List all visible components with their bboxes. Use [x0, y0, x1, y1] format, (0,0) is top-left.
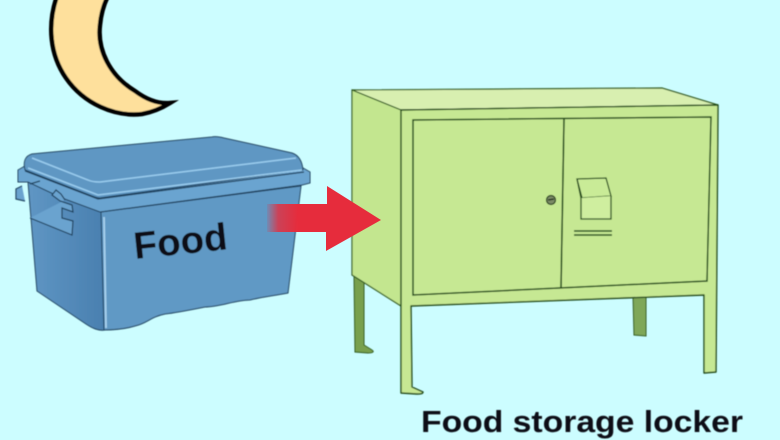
box handle and latches	[16, 181, 73, 235]
label: Food: Food	[132, 216, 229, 268]
storage box	[16, 137, 310, 330]
locker door split	[561, 119, 564, 288]
box lid	[24, 137, 303, 198]
box lid highlight	[28, 158, 302, 195]
caption: Food storage locker: Food storage locker	[421, 404, 743, 439]
box lid shadow line	[25, 171, 304, 199]
box rim	[18, 166, 310, 212]
locker top	[352, 88, 718, 110]
locker left side	[352, 90, 401, 306]
arrow	[267, 186, 381, 251]
locker door panel	[413, 117, 711, 295]
box front	[101, 186, 301, 330]
locker back-left leg	[354, 275, 373, 353]
icon: crescent moon	[51, 0, 170, 114]
locker handle	[574, 178, 612, 235]
storage locker	[352, 88, 718, 394]
locker label plate	[574, 231, 612, 235]
locker back-right leg	[633, 296, 646, 336]
box front highlight	[104, 217, 106, 328]
box left side	[28, 182, 105, 330]
locker frame and front legs	[401, 105, 718, 394]
locker keyhole	[546, 196, 556, 204]
